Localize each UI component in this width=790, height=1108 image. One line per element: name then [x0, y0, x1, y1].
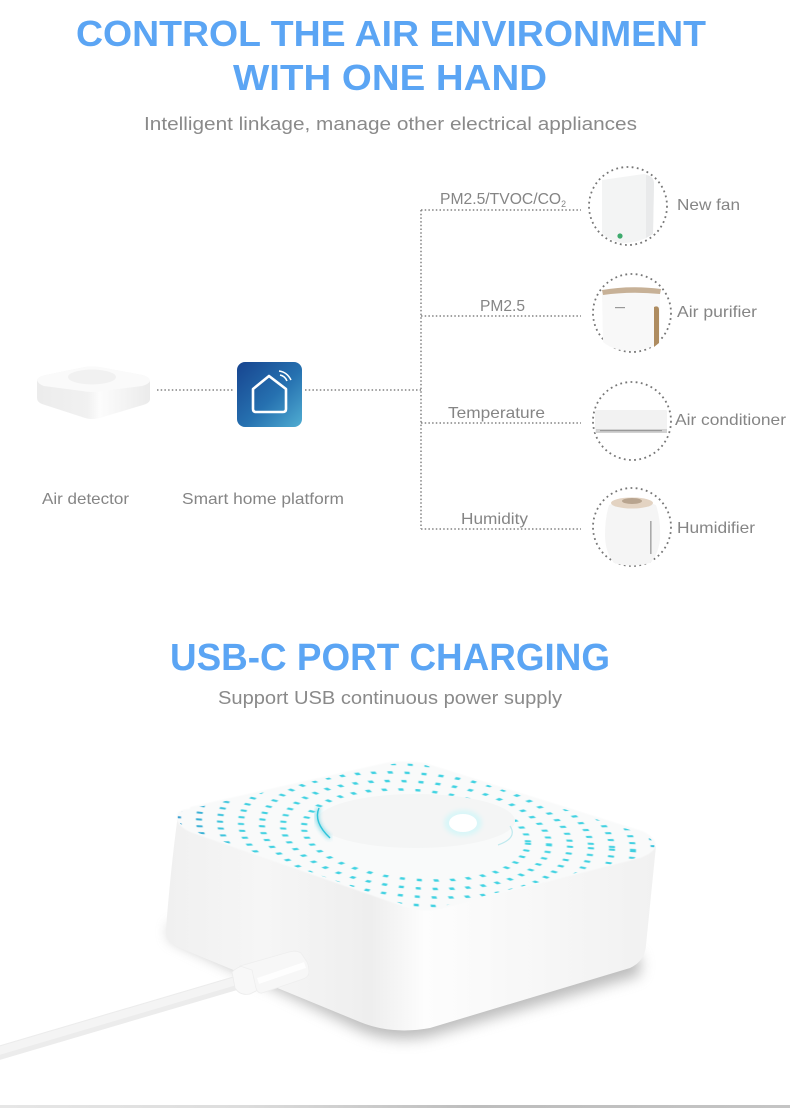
device body [166, 815, 656, 1030]
USB-C cable [0, 983, 236, 1054]
icon: air detector [37, 366, 150, 419]
center button [317, 794, 515, 848]
USB-C plug [232, 966, 258, 994]
label: smart home platform: Smart home platform [182, 491, 344, 508]
product: air detector with USB-C cable [0, 764, 656, 1060]
label: PM2.5/TVOC/CO2: PM2.5/TVOC/CO [440, 191, 564, 208]
title: WITH ONE HAND [233, 57, 547, 98]
bottom strip [0, 1105, 790, 1108]
icon: smart home platform [237, 362, 302, 427]
heading: USB-C port charging: USB-C PORT CHARGING [170, 637, 610, 679]
title: CONTROL THE AIR ENVIRONMENT [76, 13, 706, 54]
label: air detector: Air detector [42, 491, 130, 508]
perforated LED dots [178, 764, 654, 908]
subheading: USB power supply: Support USB continuous power supply [218, 688, 562, 708]
label: air purifier: Air purifier [677, 304, 758, 321]
subtitle: Intelligent linkage, manage other electrical appliances [144, 114, 637, 134]
appliance: air purifier [593, 274, 671, 352]
appliance: humidifier [593, 488, 671, 566]
device shadow [170, 925, 640, 1039]
appliance: air conditioner [593, 382, 671, 460]
title [76, 13, 706, 98]
appliance: new fan [589, 167, 667, 245]
connection lines [157, 210, 581, 529]
label: air conditioner: Air conditioner [675, 412, 787, 429]
device top surface [177, 762, 655, 911]
label: Humidity: Humidity [461, 511, 528, 528]
label: new fan: New fan [677, 197, 740, 214]
label: PM2.5: PM2.5 [480, 298, 525, 315]
label: PM2.5/TVOC/CO2: 2 [561, 199, 566, 209]
label: humidifier: Humidifier [677, 520, 756, 537]
label: Temperature: Temperature [448, 405, 545, 422]
